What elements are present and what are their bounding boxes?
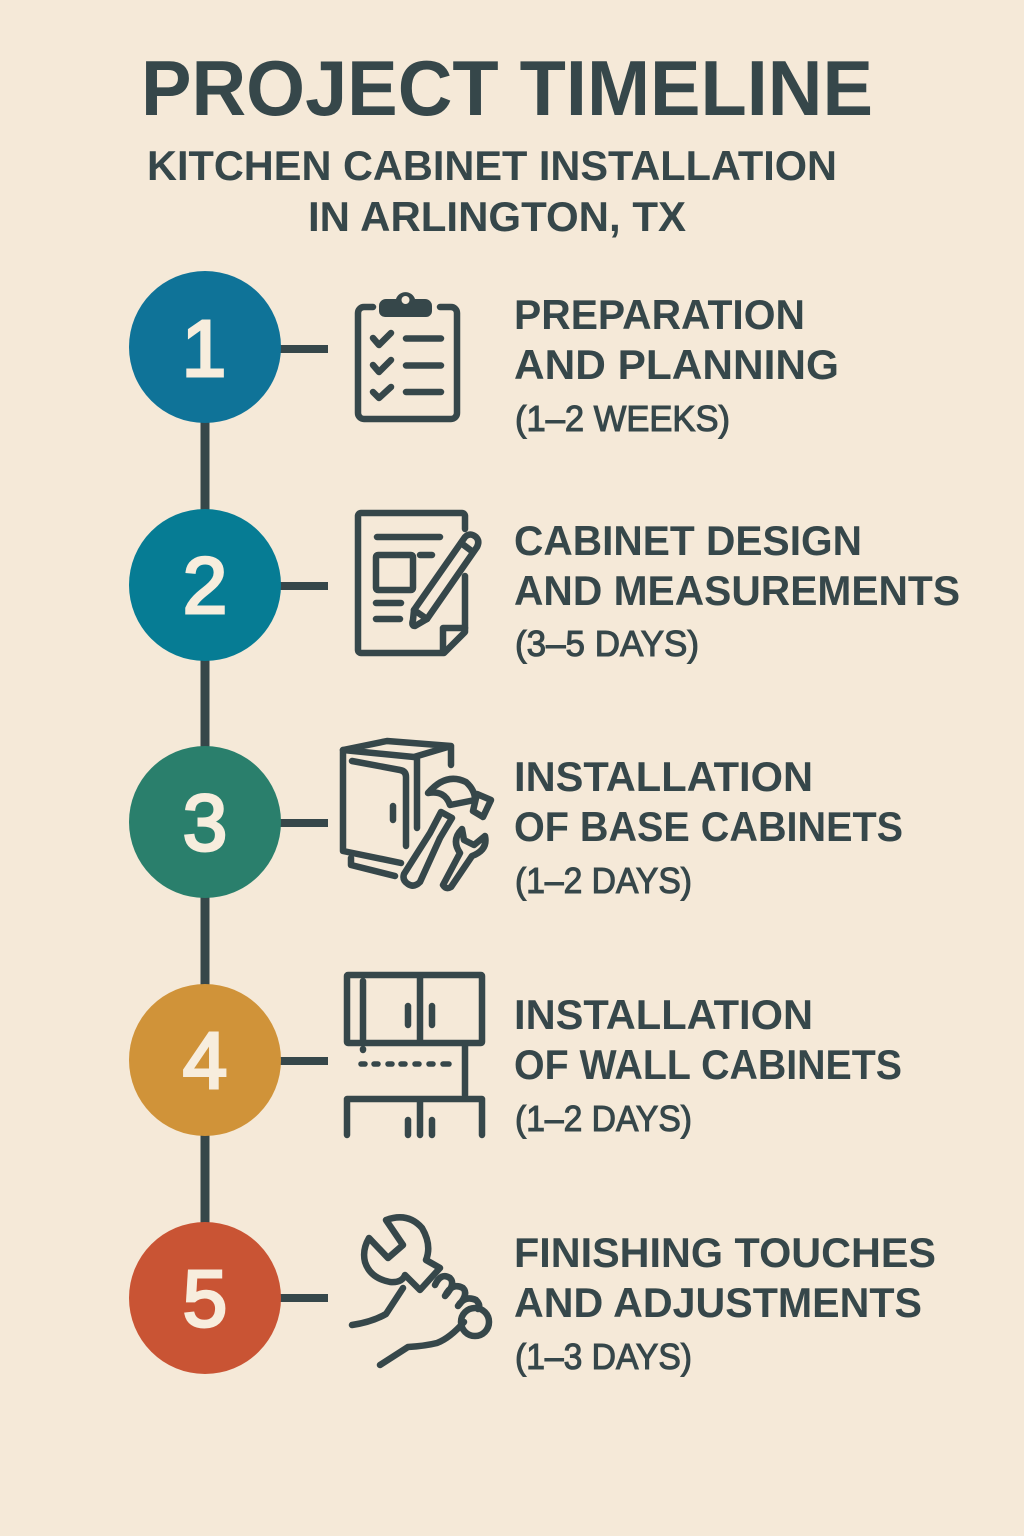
step 2 label [514,517,960,664]
step 4 label [514,991,902,1139]
number badge 4 [129,984,281,1136]
step 4 label: (1–2 DAYS) [515,1098,692,1139]
number badge 1 [129,271,281,423]
step 3 label: OF BASE CABINETS [514,803,903,850]
subtitle [147,142,837,240]
number badge 5: 5 [183,1254,227,1343]
number badge 4: 4 [183,1016,227,1105]
step 1 label [514,291,839,439]
step 5 label: AND ADJUSTMENTS [514,1279,922,1326]
step 2 [129,509,960,664]
icon: clipboard checklist [358,292,457,419]
number badge 1: 1 [182,304,226,393]
step 3 [129,741,903,901]
subtitle: KITCHEN CABINET INSTALLATION [147,142,837,189]
step 5 label [514,1229,936,1377]
step 4 [129,975,902,1139]
step 4 label: OF WALL CABINETS [514,1041,902,1088]
number badge 2 [129,509,281,661]
step 5 label: (1–3 DAYS) [515,1336,692,1377]
icon: base cabinet with hammer and wrench [343,741,491,888]
step 3 label [514,753,903,901]
step 3 label: (1–2 DAYS) [515,860,692,901]
icon: hand holding wrench [352,1217,489,1365]
step 4 label: INSTALLATION [514,991,813,1038]
step 2 label: AND MEASUREMENTS [514,567,960,614]
step 5 label: FINISHING TOUCHES [514,1229,936,1276]
step 1 label: PREPARATION [514,291,805,338]
step 1 label: AND PLANNING [514,341,839,388]
icon: wall and base cabinets [347,975,482,1135]
icon: design document and pencil [358,513,478,653]
step 1 label: (1–2 WEEKS) [515,398,730,439]
number badge 3 [129,746,281,898]
number badge 2: 2 [183,541,227,630]
title: PROJECT TIMELINE [141,44,873,132]
subtitle: IN ARLINGTON, TX [308,193,686,240]
timeline connector line [200,345,328,1302]
number badge 5 [129,1222,281,1374]
step 3 label: INSTALLATION [514,753,813,800]
step 2 label: (3–5 DAYS) [515,623,699,664]
step 2 label: CABINET DESIGN [514,517,862,564]
step 1 [129,271,839,439]
step 5 [129,1217,936,1377]
number badge 3: 3 [183,778,227,867]
